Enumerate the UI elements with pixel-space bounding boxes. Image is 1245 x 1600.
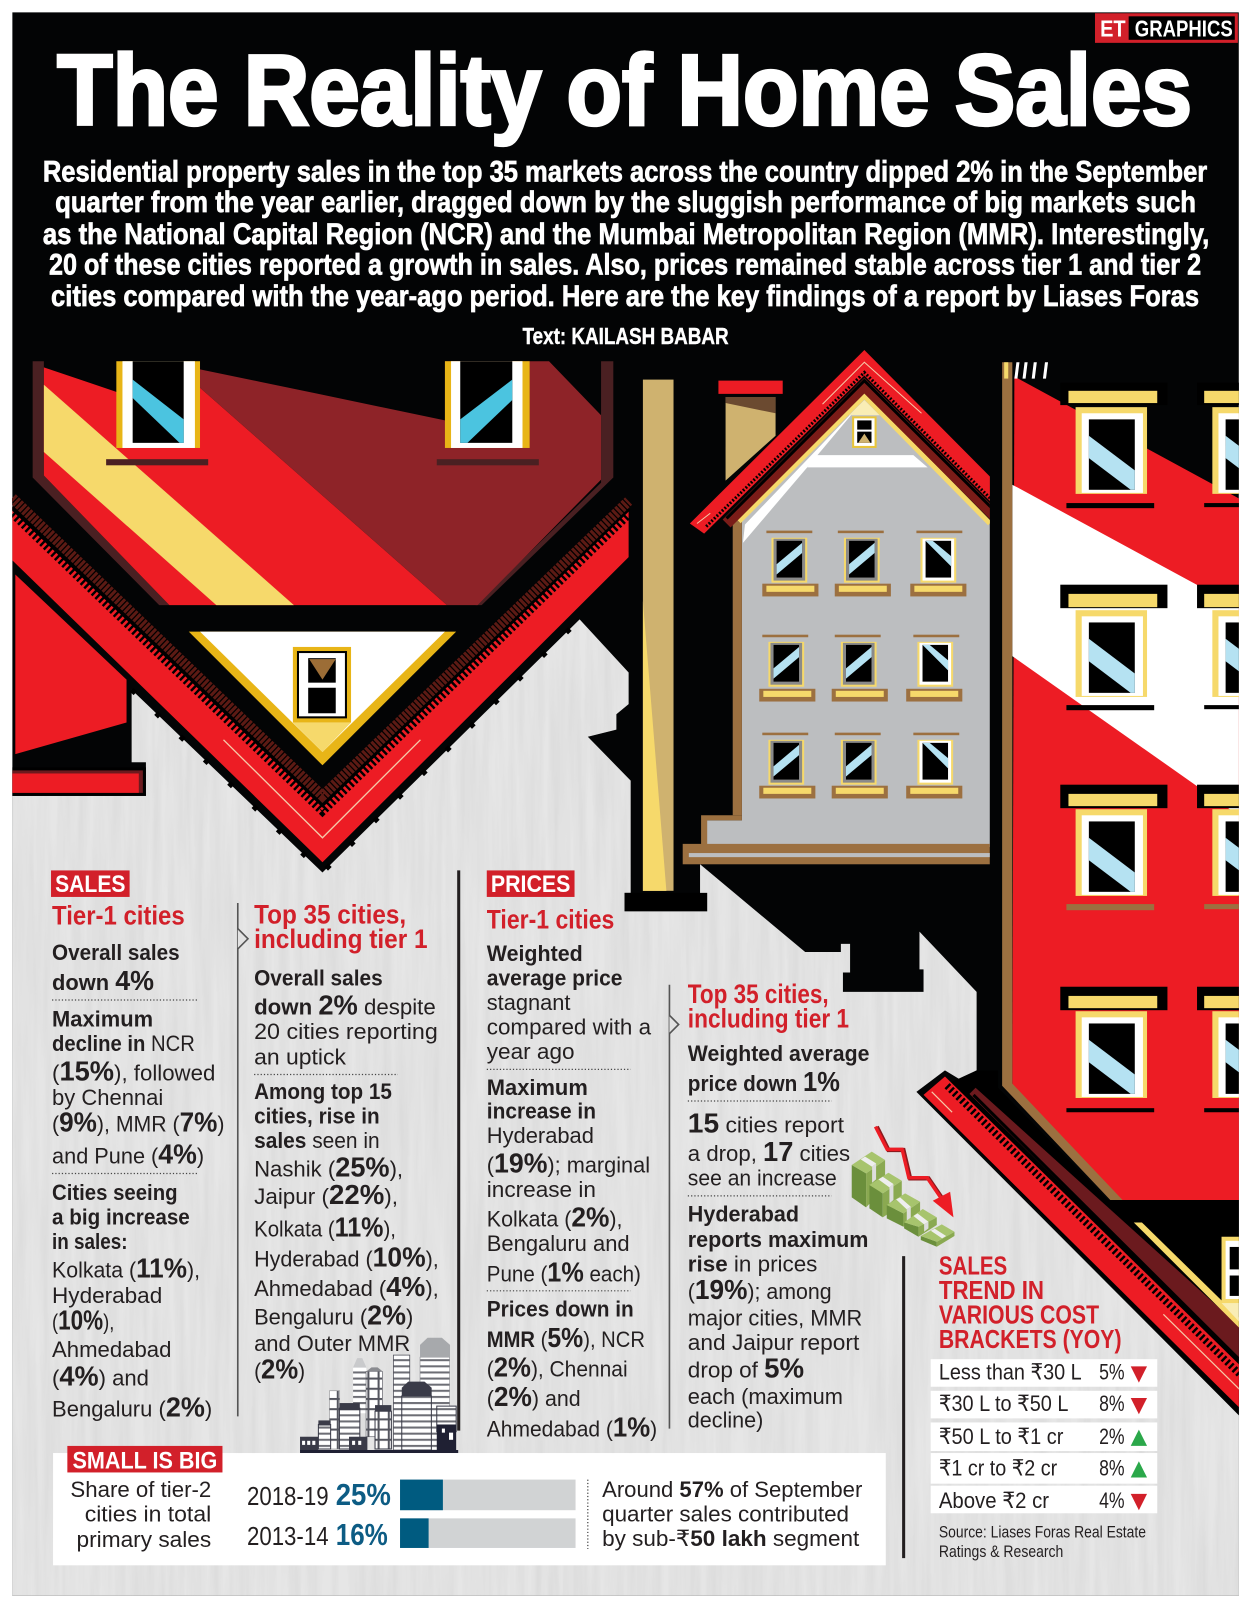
callout: 57 percent: by sub-₹50 lakh segment — [602, 1526, 860, 1551]
heading: including tier 1 — [688, 1004, 849, 1034]
heading — [939, 1252, 1122, 1354]
overall sales: 20 cities reporting — [254, 1019, 438, 1044]
heading: including tier 1 — [254, 924, 428, 954]
callout: 57 percent — [602, 1477, 863, 1551]
icon: money stacks with falling arrow — [852, 1127, 954, 1247]
row: less than 30 L: 5% — [1099, 1360, 1125, 1385]
row: 50 L to 1 cr — [931, 1422, 1157, 1451]
maximum increase: Hyderabad — [487, 1123, 594, 1148]
rise in sales list — [254, 1079, 439, 1385]
weighted average price: average price — [487, 966, 622, 991]
rise in sales list: sales seen in — [254, 1128, 380, 1153]
maximum decline: by Chennai — [52, 1085, 163, 1110]
bar 2013-14: 2013-14 — [247, 1523, 329, 1551]
callout: 57 percent: Around 57% of September — [602, 1477, 863, 1502]
Hyderabad maximum rise: reports maximum — [688, 1227, 868, 1252]
panel: prices top 35 cities — [688, 979, 869, 1433]
prices down: Ahmedabad (1%) — [487, 1412, 657, 1443]
row: 1 cr to 2 cr — [931, 1453, 1157, 1484]
overall sales: Overall sales — [254, 966, 383, 991]
Hyderabad maximum rise: drop of 5% — [688, 1353, 804, 1384]
overall sales — [254, 966, 438, 1074]
rise in sales list: Bengaluru (2%) — [254, 1299, 413, 1330]
windows column 2 — [1204, 407, 1239, 1112]
roof — [690, 350, 995, 534]
maximum decline: (9%), MMR (7%) — [52, 1107, 225, 1138]
cities seeing big increase: in sales: — [52, 1229, 128, 1254]
description: primary sales — [77, 1527, 211, 1552]
rise in sales list: (2%) — [254, 1354, 305, 1385]
gable triangle with small window — [189, 632, 456, 765]
weighted average price: Weighted — [487, 941, 583, 966]
bar 2018-19 — [247, 1478, 576, 1512]
heading: Top 35 cities, — [688, 979, 829, 1009]
prices down: (2%) and — [487, 1381, 581, 1412]
badge: ET Graphics: ET — [1100, 16, 1126, 42]
description: Share of tier-2 — [70, 1477, 211, 1502]
maximum increase: (19%); marginal — [487, 1147, 650, 1178]
Hyderabad maximum rise: decline) — [688, 1408, 763, 1433]
maximum decline: Maximum — [52, 1007, 153, 1032]
roof panel: red, yellow and dark red facets — [33, 361, 613, 605]
panel: sales top 35 cities — [254, 899, 439, 1385]
description — [70, 1477, 211, 1552]
weighted average price: compared with a — [487, 1015, 652, 1040]
weighted average price: stagnant — [487, 990, 571, 1015]
cities drop and increase: a drop, 17 cities — [688, 1136, 850, 1167]
weighted average — [688, 1041, 869, 1101]
V-shaped roof eaves — [12, 498, 629, 862]
row: 1 cr to 2 cr: 8% — [1099, 1456, 1125, 1481]
row: above 2 cr: 4% — [1099, 1488, 1125, 1513]
row: 30 L to 50 L: ₹30 L to ₹50 L — [939, 1391, 1068, 1416]
maximum increase: Bengaluru and — [487, 1231, 630, 1256]
prices tag: PRICES — [491, 871, 570, 898]
cities seeing big increase — [52, 1180, 212, 1422]
windows row 3 — [759, 733, 962, 798]
lower roof — [924, 1070, 1240, 1416]
row: above 2 cr: Above ₹2 cr — [939, 1488, 1050, 1513]
cities seeing big increase: Kolkata (11%), — [52, 1253, 200, 1284]
source note — [939, 1524, 1146, 1561]
bar 2018-19: 25% — [336, 1478, 391, 1512]
prices down: (2%), Chennai — [487, 1352, 628, 1383]
Hyderabad maximum rise: (19%); among — [688, 1274, 832, 1305]
heading: Tier-1 cities — [487, 905, 614, 935]
thick divider between sales and prices — [457, 870, 460, 1431]
windows row 2 — [759, 635, 962, 702]
panel: small is big — [53, 1446, 886, 1565]
column post — [625, 380, 707, 911]
heading: TREND IN — [939, 1277, 1044, 1305]
rise in sales list: cities, rise in — [254, 1103, 380, 1128]
divider with chevron: prices — [669, 985, 679, 1429]
intro paragraph — [43, 156, 1209, 313]
panel: sales trend in various cost brackets — [931, 1252, 1157, 1561]
cities seeing big increase: Ahmedabad — [52, 1337, 171, 1362]
panel: prices tier-1 cities — [487, 870, 657, 1443]
cities seeing big increase: a big increase — [52, 1204, 190, 1229]
Hyderabad maximum rise: and Jaipur report — [688, 1330, 860, 1355]
rise in sales list: Ahmedabad (4%), — [254, 1271, 439, 1302]
divider: cost brackets — [902, 1256, 905, 1558]
cities seeing big increase: (10%), — [52, 1305, 114, 1336]
maximum decline: (15%), followed — [52, 1056, 215, 1087]
weighted average price: year ago — [487, 1039, 575, 1064]
house 1: big roof seen from above — [12, 361, 629, 862]
lower gable — [1134, 1222, 1242, 1329]
maximum increase: increase in — [487, 1098, 596, 1123]
weighted average: Weighted average — [688, 1041, 869, 1066]
callout: 57 percent: quarter sales contributed — [602, 1501, 849, 1526]
tag: SMALL IS BIG — [72, 1447, 217, 1474]
heading — [254, 899, 428, 954]
overall sales: down 2% despite — [254, 989, 436, 1020]
badge: ET Graphics — [1095, 13, 1238, 43]
grey wall — [683, 395, 990, 864]
Hyderabad maximum rise: each (maximum — [688, 1384, 843, 1409]
row: less than 30 L: Less than ₹30 L — [939, 1360, 1082, 1385]
source note: Source: Liases Foras Real Estate — [939, 1524, 1146, 1542]
rise in sales list: Hyderabad (10%), — [254, 1241, 439, 1272]
maximum increase — [487, 1075, 650, 1291]
source note: Ratings & Research — [939, 1543, 1063, 1561]
maximum decline: decline in NCR — [52, 1031, 195, 1056]
windows column 1 — [1066, 407, 1154, 1112]
rise in sales list: Jaipur (22%), — [254, 1179, 398, 1210]
house 3: red building at right — [924, 362, 1245, 1416]
heading: Top 35 cities, — [254, 899, 406, 929]
maximum increase: Kolkata (2%), — [487, 1202, 622, 1233]
overall sales: down 4% — [52, 965, 154, 996]
prices down: MMR (5%), NCR — [487, 1322, 645, 1353]
Hyderabad maximum rise — [688, 1201, 868, 1433]
cities drop and increase: see an increase — [688, 1166, 837, 1191]
prices down: Prices down in — [487, 1296, 634, 1321]
overall sales: an uptick — [254, 1044, 347, 1069]
chimney — [718, 381, 783, 481]
bar 2013-14 — [247, 1518, 576, 1552]
byline: Text: KAILASH BABAR — [522, 323, 729, 349]
prices down — [487, 1296, 657, 1443]
bar 2018-19: 2018-19 — [247, 1483, 329, 1511]
rise in sales list: and Outer MMR — [254, 1331, 410, 1356]
maximum decline: and Pune (4%) — [52, 1138, 204, 1169]
maximum increase: Pune (1% each) — [487, 1257, 641, 1288]
row: less than 30 L — [931, 1359, 1157, 1387]
window caps — [1060, 383, 1245, 1010]
facade — [1002, 362, 1240, 1200]
heading: SALES — [939, 1252, 1007, 1280]
heading: Tier-1 cities — [52, 900, 185, 930]
panel: sales tier-1 cities — [51, 870, 225, 1422]
row: 50 L to 1 cr: 2% — [1099, 1424, 1125, 1449]
description: cities in total — [85, 1501, 211, 1526]
cities seeing big increase: Cities seeing — [52, 1180, 178, 1205]
window left — [106, 361, 208, 465]
row: 50 L to 1 cr: ₹50 L to ₹1 cr — [939, 1424, 1064, 1449]
attic window — [852, 416, 877, 448]
Hyderabad maximum rise: Hyderabad — [688, 1201, 799, 1226]
cities drop and increase: 15 cities report — [688, 1108, 845, 1139]
textured grey ground — [12, 612, 1240, 1596]
row: 1 cr to 2 cr: ₹1 cr to ₹2 cr — [939, 1456, 1058, 1481]
maximum increase: Maximum — [487, 1075, 588, 1100]
overall sales — [52, 940, 199, 1000]
rise in sales list: Kolkata (11%), — [254, 1212, 396, 1243]
heading — [688, 979, 849, 1034]
Hyderabad maximum rise: major cities, MMR — [688, 1306, 862, 1331]
row: 30 L to 50 L: 8% — [1099, 1391, 1125, 1416]
heading: VARIOUS COST — [939, 1301, 1099, 1329]
rise in sales list: Nashik (25%), — [254, 1152, 403, 1183]
lower left wall fragment — [12, 574, 146, 796]
cities seeing big increase: Hyderabad — [52, 1283, 162, 1308]
bar 2013-14: 16% — [336, 1518, 388, 1552]
maximum decline — [52, 1007, 225, 1173]
heading: BRACKETS (YOY) — [939, 1326, 1122, 1354]
weighted average price — [487, 941, 652, 1069]
rise in sales list: Among top 15 — [254, 1079, 392, 1104]
Hyderabad maximum rise: rise in prices — [688, 1251, 817, 1276]
weighted average: price down 1% — [688, 1066, 840, 1097]
windows row 1 — [762, 531, 966, 596]
cities seeing big increase: Bengaluru (2%) — [52, 1391, 212, 1422]
house 2: grey building — [683, 350, 995, 864]
cities seeing big increase: (4%) and — [52, 1361, 149, 1392]
row: above 2 cr — [931, 1486, 1157, 1513]
window right — [437, 361, 539, 465]
icon: city skyline — [300, 1338, 458, 1453]
cities drop and increase — [688, 1108, 850, 1196]
maximum increase: increase in — [487, 1177, 596, 1202]
sales tag: SALES — [55, 871, 126, 898]
overall sales: Overall sales — [52, 940, 180, 965]
divider with chevron: sales — [238, 903, 248, 1416]
row: 30 L to 50 L — [931, 1391, 1157, 1418]
